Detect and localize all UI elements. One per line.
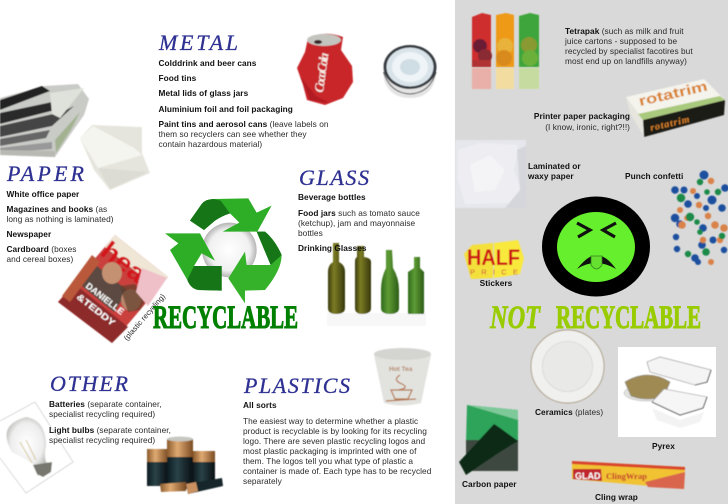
image: heat magazine: &TEDDY bbox=[75, 292, 117, 328]
text: printer paper packaging: (I know, ironic, right?!!) bbox=[545, 122, 630, 132]
text: laminated paper: waxy paper bbox=[527, 171, 574, 181]
text: paper list: and cereal boxes) bbox=[6, 254, 73, 264]
image: glad cling wrap box bbox=[572, 461, 685, 489]
text: tetrapak: juice cartons - supposed to be bbox=[564, 36, 678, 46]
text: paper list: Newspaper bbox=[6, 229, 52, 239]
image: food tin bbox=[383, 45, 436, 98]
image: tetrapak cartons bbox=[472, 13, 539, 89]
image: crushed cola can bbox=[297, 34, 353, 105]
heading: not recyclable bbox=[489, 300, 701, 336]
text: metal list: contain hazardous material) bbox=[158, 139, 262, 149]
text: printer paper packaging bbox=[534, 111, 630, 132]
text: metal list: them so recyclers can see whether they bbox=[158, 129, 307, 139]
text: tetrapak bbox=[564, 26, 693, 66]
heading: plastics: PLASTICS bbox=[243, 373, 350, 398]
text: metal list bbox=[158, 58, 329, 149]
text: glass list: Beverage bottles bbox=[298, 192, 366, 202]
text: metal list: Metal lids of glass jars bbox=[158, 88, 249, 98]
text: glass list bbox=[298, 192, 420, 253]
text: plastics description: The easiest way to determine whether a plastic bbox=[243, 416, 418, 426]
text: paper list: Cardboard (boxes bbox=[6, 244, 76, 254]
image: half price stickers: PRICE bbox=[470, 268, 518, 276]
image: glass bottles bbox=[327, 243, 426, 326]
image: paper cup bbox=[374, 348, 431, 406]
text: cling wrap label: Cling wrap bbox=[595, 492, 638, 502]
image: crushed cola can: CocaCola bbox=[311, 51, 332, 93]
image: rotatrim box: rotatrim bbox=[649, 114, 691, 134]
image: newspaper stack bbox=[0, 84, 89, 157]
text: plastics description: logo. There are seven plastic recycling logos and bbox=[243, 436, 426, 446]
text: other list: specialist recycling required) bbox=[49, 409, 155, 419]
image: heat magazine: heat bbox=[95, 235, 160, 295]
image: waxy paper bbox=[455, 140, 526, 208]
text: metal list: Colddrink and beer cans bbox=[158, 58, 257, 68]
image: light bulb bbox=[0, 402, 73, 493]
image: batteries bbox=[147, 436, 223, 494]
heading: not recyclable: NOT bbox=[489, 300, 541, 336]
image: paper cup: Hot Tea bbox=[389, 366, 413, 373]
text: tetrapak: most end up on landfills anyway) bbox=[565, 56, 687, 66]
text: punch confetti: Punch confetti bbox=[625, 171, 683, 181]
text: plastic recycling note: (plastic recycling) bbox=[122, 292, 167, 342]
heading: other: OTHER bbox=[50, 371, 129, 396]
text: other list bbox=[49, 399, 171, 445]
text: paper list bbox=[6, 189, 114, 264]
text: glass list: bottles bbox=[298, 228, 323, 238]
image: pyrex dishes bbox=[618, 347, 716, 437]
text: tetrapak: recycled by specialist facotires but bbox=[565, 46, 693, 56]
text: pyrex label: Pyrex bbox=[652, 441, 675, 451]
text: metal list: Paint tins and aerosol cans (leave labels on bbox=[158, 119, 329, 129]
image: rotatrim box: rotatrim bbox=[637, 78, 709, 109]
text: printer paper packaging: Printer paper packaging bbox=[534, 111, 630, 121]
text: laminated paper bbox=[527, 161, 581, 181]
text: other list: specialist recycling required) bbox=[49, 435, 155, 445]
text: plastics description: separately bbox=[243, 476, 283, 486]
text: plastics description bbox=[243, 400, 432, 486]
image: recycling logo bbox=[165, 198, 282, 303]
text: metal list: Food tins bbox=[158, 73, 197, 83]
icon: mr yuk face bbox=[542, 196, 650, 296]
text: laminated paper: Laminated or bbox=[528, 161, 581, 171]
image: confetti bbox=[671, 170, 728, 265]
text: plastics description: them. The logos tell you what type of plastic a bbox=[243, 456, 413, 466]
heading: glass: GLASS bbox=[299, 165, 369, 190]
image: half price stickers: HALF bbox=[467, 245, 520, 270]
text: glass list: Drinking Glasses bbox=[298, 243, 367, 253]
text: carbon paper label: Carbon paper bbox=[462, 479, 517, 489]
text: plastics description: All sorts bbox=[243, 400, 277, 410]
image: rotatrim box bbox=[626, 78, 725, 137]
text: other list: Light bulbs (separate container, bbox=[49, 425, 171, 435]
image: ceramic plate bbox=[531, 330, 604, 403]
text: metal list: Aluminium foil and foil packaging bbox=[158, 104, 293, 114]
heading: paper: PAPER bbox=[6, 161, 85, 186]
text: glass list: Food jars such as tomato sauce bbox=[298, 208, 420, 218]
image: white office paper bbox=[80, 125, 150, 190]
image: heat magazine bbox=[58, 235, 168, 343]
panel: not recyclable background bbox=[455, 0, 728, 504]
image: half price stickers bbox=[464, 240, 524, 279]
text: tetrapak: Tetrapak (such as milk and fruit bbox=[565, 26, 684, 36]
text: paper list: Magazines and books (as bbox=[6, 204, 107, 214]
image: glad cling wrap box: GLAD bbox=[575, 471, 601, 481]
text: paper list: long as nothing is laminated) bbox=[6, 214, 114, 224]
image: carbon paper bbox=[459, 405, 518, 475]
text: paper list: White office paper bbox=[6, 189, 80, 199]
text: plastics description: container is made of. Each type has to be recycled bbox=[243, 466, 432, 476]
text: plastics description: product is recyclable is by looking for its recycling bbox=[243, 426, 427, 436]
heading: metal: METAL bbox=[158, 30, 238, 55]
image: heat magazine: DANIELLE bbox=[84, 281, 126, 317]
image: glad cling wrap box: ClingWrap bbox=[606, 471, 647, 481]
heading: recyclable: RECYCLABLE bbox=[153, 300, 298, 336]
text: other list: Batteries (separate container, bbox=[49, 399, 162, 409]
text: stickers label: Stickers bbox=[480, 278, 513, 288]
text: ceramics label: Ceramics (plates) bbox=[535, 407, 603, 417]
text: glass list: (ketchup), jam and mayonnaise bbox=[298, 218, 416, 228]
text: plastics description: most plastic packaging is imprinted with one of bbox=[243, 446, 417, 456]
